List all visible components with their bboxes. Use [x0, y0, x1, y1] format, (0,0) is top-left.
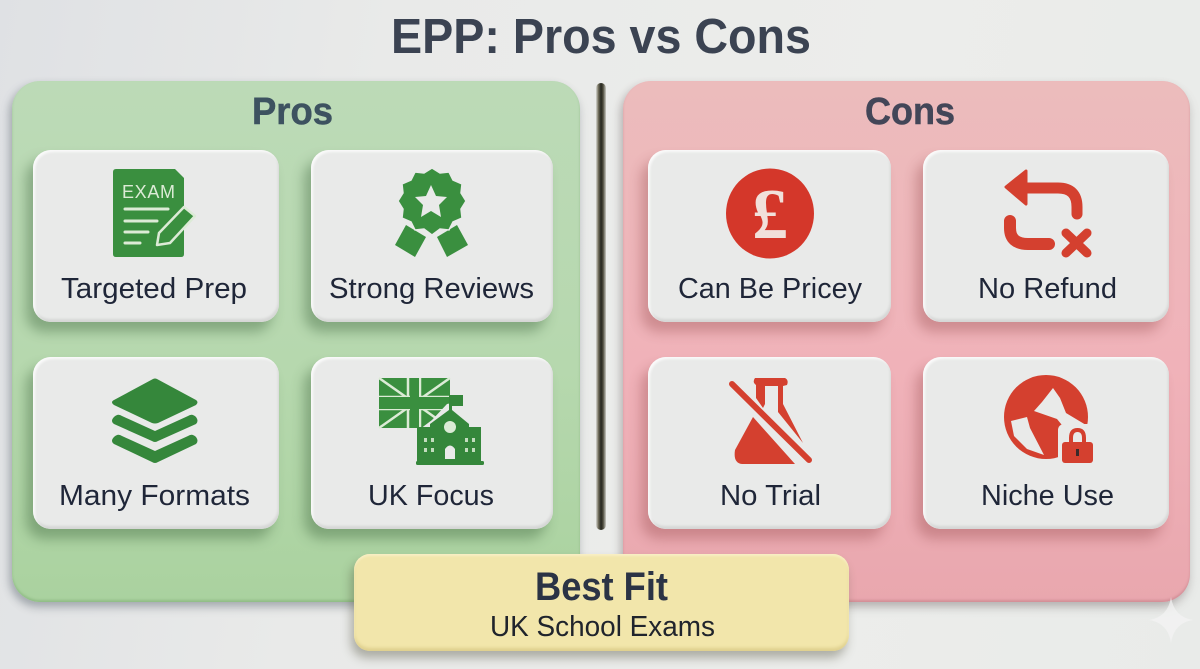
- label: no trial: No Trial: [720, 480, 821, 512]
- card: niche use: [923, 357, 1169, 529]
- label: strong reviews: Strong Reviews: [329, 273, 534, 305]
- label: no refund: No Refund: [978, 273, 1117, 305]
- vertical divider: [596, 83, 606, 530]
- card: UK focus: [311, 357, 553, 529]
- label: targeted prep: Targeted Prep: [61, 273, 247, 305]
- watermark sparkle: [1149, 597, 1193, 643]
- card: no refund: [923, 150, 1169, 322]
- title: EPP: Pros vs Cons: [391, 10, 811, 64]
- heading: pros: Pros: [252, 91, 333, 133]
- callout subtext: UK School Exams: [490, 611, 715, 643]
- icon: stacked layers: [112, 378, 198, 463]
- icon: exam paper with pencil: EXAM: [122, 182, 175, 202]
- icon: pound coin: [726, 168, 814, 258]
- icon: crossed-out flask: [730, 378, 810, 464]
- card: many formats: [33, 357, 279, 529]
- card: can be pricey: [648, 150, 891, 322]
- label: niche use: Niche Use: [981, 480, 1114, 512]
- callout heading: best fit: Best Fit: [535, 565, 668, 609]
- panel: cons background: [623, 81, 1190, 602]
- icon: UK flag and school: [379, 378, 490, 470]
- callout: best fit background: [354, 554, 849, 651]
- label: many formats: Many Formats: [59, 480, 250, 512]
- card: targeted prep: [33, 150, 279, 322]
- icon: exam paper with pencil: [113, 169, 195, 257]
- label: can be pricey: Can Be Pricey: [678, 273, 862, 305]
- icon: globe with lock: [1004, 375, 1096, 466]
- panel: pros background: [12, 81, 580, 602]
- card: strong reviews: [311, 150, 553, 322]
- label: UK focus: UK Focus: [368, 480, 494, 512]
- icon: pound coin: £: [752, 174, 788, 254]
- icon: award rosette: [395, 168, 468, 257]
- icon: no refund arrows: [1006, 171, 1087, 253]
- heading: cons: Cons: [865, 91, 955, 133]
- card: no trial: [648, 357, 891, 529]
